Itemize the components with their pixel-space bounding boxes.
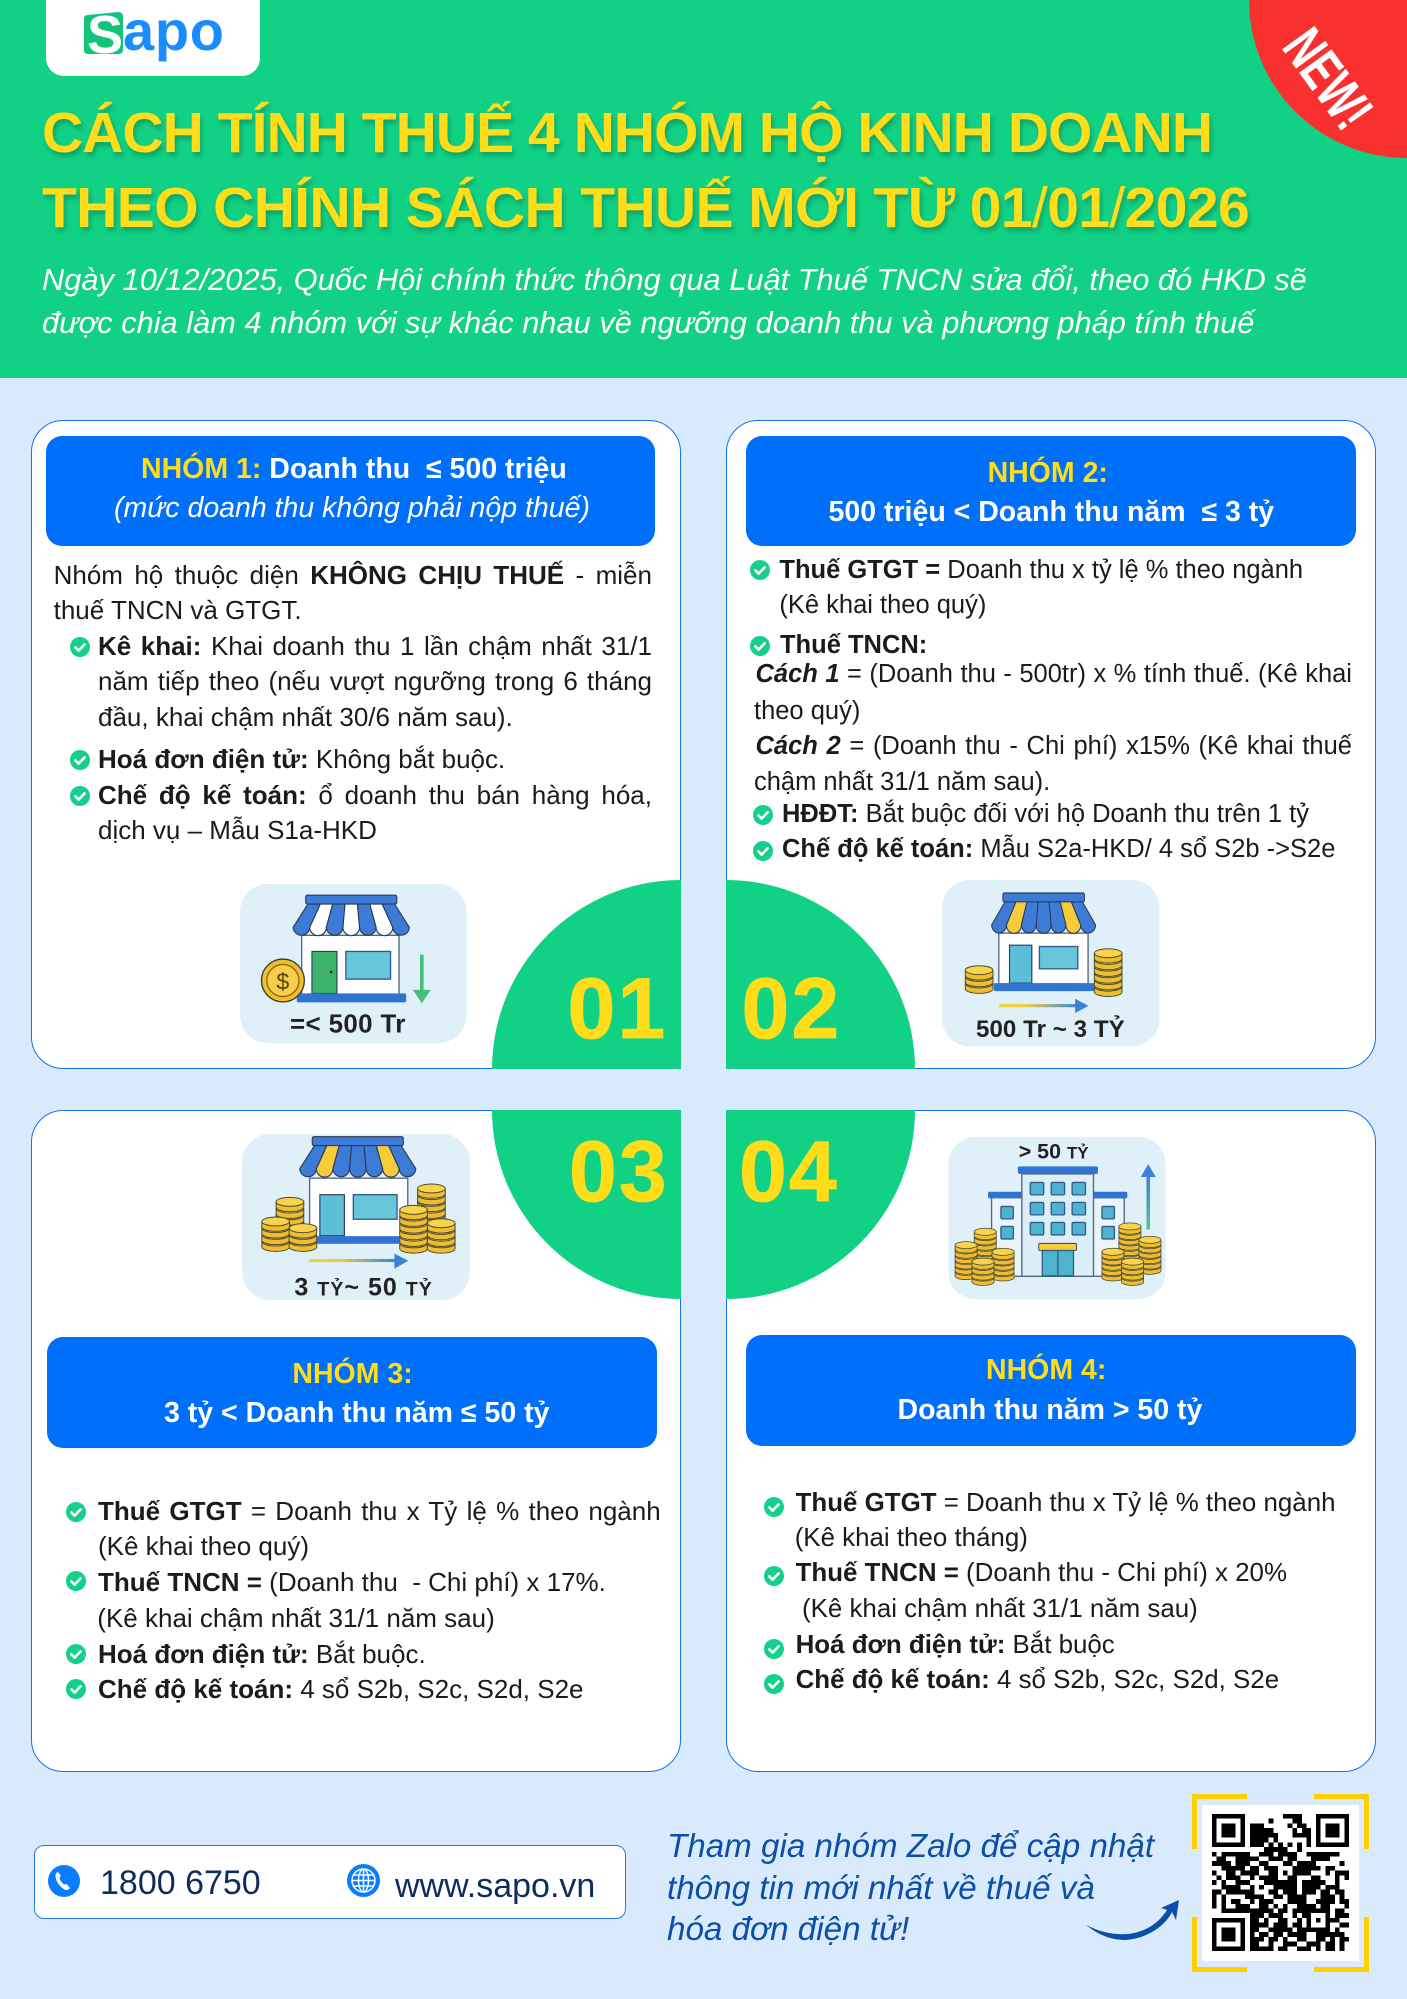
panel: nhóm 4 [726,1110,1376,1772]
number badge: 02: 02 [742,961,841,1057]
bullet: thuế TNCN: Thuế TNCN = (Doanh thu - Chi phí) x 20% [796,1559,1287,1587]
heading: nhóm 4 [746,1335,1356,1446]
bullet: kê khai [70,631,652,732]
heading: nhóm 2: 500 triệu < Doanh thu năm ≤ 3 tỷ [828,496,1274,528]
bullet: chế độ kế toán: Chế độ kế toán: 4 sổ S2b, S2c, S2d, S2e [796,1666,1279,1694]
illustration: shop 500 million to 3 billion: 500 Tr ~ 3 TỶ [976,1014,1125,1043]
title: CÁCH TÍNH THUẾ 4 NHÓM HỘ KINH DOANH [42,101,1212,165]
bullet: hoá đơn điện tử: Hoá đơn điện tử: Bắt buộc. [98,1639,426,1669]
bullet: thuế TNCN: Thuế TNCN: [780,631,927,659]
panel: nhóm 1 [31,420,681,1069]
illustration: building over 50 billion [948,1137,1166,1299]
illustration: building over 50 billion: > 50 TỶ [1019,1139,1089,1163]
heading: nhóm 3: NHÓM 3: [292,1358,413,1390]
bullet: thuế GTGT [66,1496,661,1561]
bullet: thuế TNCN: chậm nhất 31/1 năm sau). [754,768,1050,796]
bullet: thuế TNCN [750,631,1352,796]
bullet: chế độ kế toán: Chế độ kế toán: ổ doanh thu bán hàng hóa, [98,780,652,810]
bullet: thuế TNCN: (Kê khai chậm nhất 31/1 năm sau) [97,1603,495,1633]
bullet: thuế GTGT: (Kê khai theo quý) [98,1531,309,1561]
illustration: shop under 500 million [240,884,466,1043]
heading: nhóm 1: NHÓM 1: Doanh thu ≤ 500 triệu [141,453,567,485]
heading: nhóm 1: (mức doanh thu không phải nộp thuế) [114,492,590,524]
heading: nhóm 2 [746,436,1356,546]
text: intro: Nhóm hộ thuộc diện KHÔNG CHỊU THUẾ - miễn [54,560,652,590]
icon: phone [48,1865,80,1897]
illustration: shop 3 to 50 billion [242,1134,470,1300]
bullet: chế độ kế toán [70,780,652,845]
subtitle: được chia làm 4 nhóm với sự khác nhau về ngưỡng doanh thu và phương pháp tính thuế [42,305,1254,340]
bullet: thuế TNCN: Cách 1 = (Doanh thu - 500tr) x % tính thuế. (Kê khai [755,660,1352,688]
bullet: thuế GTGT: (Kê khai theo quý) [779,590,986,618]
logo: Sapo: S [87,5,123,65]
bullet: HĐĐT: HĐĐT: Bắt buộc đối với hộ Doanh thu trên 1 tỷ [782,800,1309,828]
bullet: hoá đơn điện tử: Hoá đơn điện tử: Bắt buộc [796,1631,1115,1659]
bullet: thuế TNCN: (Kê khai chậm nhất 31/1 năm sau) [802,1595,1198,1623]
bullet: kê khai: đầu, khai chậm nhất 30/6 năm sau). [98,702,513,732]
subtitle [42,262,1307,340]
logo: Sapo [46,0,260,76]
callout: zalo group: hóa đơn điện tử! [667,1911,909,1948]
panel: nhóm 3 [31,1110,681,1772]
bullet: thuế TNCN [66,1567,606,1633]
number badge: 04 [726,1110,915,1299]
phone number: 1800 6750 [100,1864,261,1902]
title [42,101,1252,240]
website: www.sapo.vn [395,1866,595,1904]
subtitle: Ngày 10/12/2025, Quốc Hội chính thức thông qua Luật Thuế TNCN sửa đổi, theo đó HKD sẽ [42,262,1307,297]
callout: zalo group: Tham gia nhóm Zalo để cập nhật [667,1828,1154,1865]
icon: globe [347,1864,380,1897]
number badge: 01 [492,880,681,1069]
panel: nhóm 2 [726,420,1376,1069]
contact box [34,1845,626,1919]
bullet: thuế TNCN: Cách 2 = (Doanh thu - Chi phí) x15% (Kê khai thuế [755,732,1352,760]
heading: nhóm 4: NHÓM 4: [986,1354,1106,1386]
arrow: to QR [1086,1900,1179,1940]
number badge: 04: 04 [739,1124,839,1220]
text: intro: thuế TNCN và GTGT. [54,595,302,625]
badge: NEW!: NEW! [1270,16,1386,141]
illustration: shop under 500 million: =< 500 Tr [290,1011,405,1039]
number badge: 03 [492,1110,681,1299]
badge: NEW! [1249,0,1407,158]
QR code with frame [1192,1794,1369,1972]
bullet: thuế GTGT: Thuế GTGT = Doanh thu x tỷ lệ % theo ngành [779,556,1303,584]
bullet: thuế GTGT [764,1489,1336,1552]
illustration: shop under 500 million: $ [276,968,289,994]
bullet: thuế TNCN [764,1559,1287,1623]
title: THEO CHÍNH SÁCH THUẾ MỚI TỪ 01/01/2026 [42,176,1249,240]
bullet: thuế GTGT: (Kê khai theo tháng) [795,1524,1028,1552]
callout: zalo group: thông tin mới nhất về thuế và [667,1870,1095,1907]
bullet: thuế GTGT [750,556,1303,618]
header banner [0,0,1407,378]
heading: nhóm 3 [47,1337,657,1448]
callout: zalo group [667,1828,1156,1948]
bullet: kê khai: Kê khai: Khai doanh thu 1 lần chậm nhất 31/1 [98,631,652,661]
illustration: shop 500 million to 3 billion [942,880,1160,1046]
bullet: thuế TNCN: theo quý) [754,697,860,725]
number badge: 02 [726,880,915,1069]
text: intro [54,560,652,625]
bullet: chế độ kế toán: Chế độ kế toán: Mẫu S2a-HKD/ 4 sổ S2b ->S2e [782,835,1335,863]
number badge: 03: 03 [569,1124,669,1220]
heading: nhóm 3: 3 tỷ < Doanh thu năm ≤ 50 tỷ [164,1397,549,1429]
bullet: thuế GTGT: Thuế GTGT = Doanh thu x Tỷ lệ % theo ngành [98,1496,661,1526]
bullet: hoá đơn điện tử: Hoá đơn điện tử: Không bắt buộc. [98,744,505,774]
heading: nhóm 1 [46,436,655,546]
bullet: thuế GTGT: Thuế GTGT = Doanh thu x Tỷ lệ % theo ngành [796,1489,1336,1517]
heading: nhóm 4: Doanh thu năm > 50 tỷ [898,1394,1202,1426]
number badge: 01: 01 [568,961,667,1057]
bullet: chế độ kế toán: dịch vụ – Mẫu S1a-HKD [98,815,377,845]
heading: nhóm 2: NHÓM 2: [988,457,1108,489]
bullet: kê khai: năm tiếp theo (nếu vượt ngưỡng trong 6 tháng [98,666,652,696]
bullet: chế độ kế toán: Chế độ kế toán: 4 sổ S2b, S2c, S2d, S2e [98,1674,584,1704]
bullet: thuế TNCN: Thuế TNCN = (Doanh thu - Chi phí) x 17%. [98,1567,606,1597]
